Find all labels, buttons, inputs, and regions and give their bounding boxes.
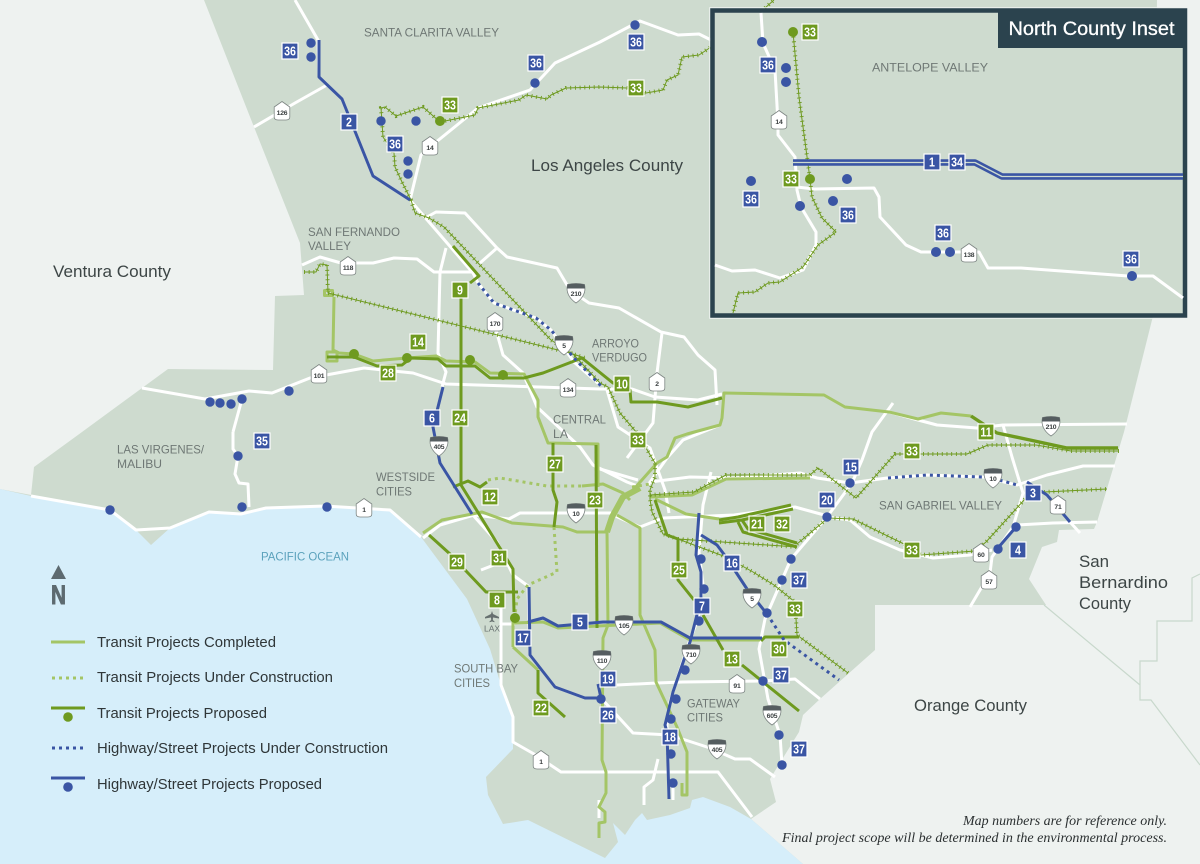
icon: north arrow: N [51, 580, 66, 610]
shield 101: 101 [314, 373, 325, 380]
shield 170: 170 [490, 321, 501, 328]
badge 32: 32 [776, 518, 788, 532]
badge 26: 26 [602, 709, 614, 723]
inset badge 36 [935, 225, 951, 241]
shield 60: 60 [977, 552, 985, 559]
Arroyo Verdugo label: VERDUGO [592, 350, 647, 364]
badge 36 [387, 136, 403, 152]
inset badge 34 [949, 154, 965, 170]
badge 17 [515, 630, 531, 646]
inset shield 14: 14 [775, 119, 783, 126]
transit projects proposed [327, 246, 1118, 717]
badge 33 [904, 443, 920, 459]
badge 11: 11 [980, 426, 992, 440]
shield 118: 118 [343, 265, 354, 272]
badge 26 [600, 707, 616, 723]
badge 35: 35 [256, 435, 268, 449]
Central LA label: CENTRAL [553, 412, 606, 426]
badge 37: 37 [793, 574, 805, 588]
inset badge 36 [1123, 251, 1139, 267]
badge 24 [452, 410, 468, 426]
badge 31: 31 [493, 552, 505, 566]
inset badge 1 [924, 154, 940, 170]
rail under construction: line 33 with cross ties [304, 0, 1119, 673]
highway and street projects proposed [319, 40, 1070, 799]
badge 5: 5 [577, 616, 583, 630]
badge 33: 33 [906, 445, 918, 459]
shield 2 [649, 372, 665, 391]
shield I-5 north: 5 [562, 343, 566, 350]
San Gabriel Valley label: SAN GABRIEL VALLEY [879, 498, 1002, 512]
badge 33 [630, 432, 646, 448]
inset badge 36: 36 [1125, 253, 1137, 267]
San Bernardino County label: County [1079, 595, 1132, 613]
highway and street projects under construction [478, 283, 1017, 680]
shield 126: 126 [277, 110, 288, 117]
legend: transit under construction: Transit Projects Under Construction [97, 670, 333, 686]
badge 33: 33 [906, 544, 918, 558]
badge 36 [628, 34, 644, 50]
shield I-5 south [743, 588, 761, 608]
badge 33: 33 [789, 603, 801, 617]
badge 18 [662, 729, 678, 745]
inset badge 33 [783, 171, 799, 187]
badge 23 [587, 492, 603, 508]
Orange County label: Orange County [914, 697, 1028, 715]
shield I-710 [682, 644, 700, 664]
shield 1 south: 1 [539, 759, 543, 766]
badge 8: 8 [494, 594, 500, 608]
transit projects completed [324, 290, 971, 838]
shield 60 [973, 544, 989, 562]
badge 5 [572, 614, 588, 630]
shield 170 [487, 312, 503, 331]
badge 27: 27 [549, 458, 561, 472]
highway shields [274, 102, 1066, 769]
shield I-5 south: 5 [750, 596, 754, 603]
shield I-10 east [984, 468, 1002, 488]
Westside Cities label: WESTSIDE [376, 470, 435, 484]
shield I-405 south: 405 [712, 747, 723, 754]
shield 71 [1050, 496, 1066, 514]
inset background and frame [710, 8, 1188, 318]
transit projects under construction: light green dotted [488, 478, 650, 615]
inset badge 36 [760, 57, 776, 73]
badge 33: 33 [630, 82, 642, 96]
shield 57: 57 [985, 579, 993, 586]
badge 25 [671, 562, 687, 578]
shield I-10 west: 10 [572, 511, 580, 518]
Pacific Ocean label: PACIFIC OCEAN [261, 550, 349, 564]
inset badge 33: 33 [804, 26, 816, 40]
badge 29: 29 [451, 556, 463, 570]
Gateway Cities label: GATEWAY [687, 696, 740, 710]
Gateway Cities label [687, 696, 740, 724]
Las Virgenes Malibu label: MALIBU [117, 457, 162, 471]
shield 1 Malibu [356, 498, 372, 517]
badge 20: 20 [821, 494, 833, 508]
Central LA label: LA [553, 427, 568, 441]
badge 2: 2 [346, 116, 352, 130]
badge 28: 28 [382, 367, 394, 381]
badge 33: 33 [632, 434, 644, 448]
legend: highway under construction: Highway/Street Projects Under Construction [97, 741, 388, 757]
inset badge 33: 33 [785, 173, 797, 187]
badge 37: 37 [793, 743, 805, 757]
badge 22: 22 [535, 702, 547, 716]
inset: Antelope Valley label: ANTELOPE VALLEY [872, 60, 988, 74]
reference note: Final project scope will be determined in the environmental process. [781, 831, 1167, 846]
badge 4: 4 [1015, 544, 1021, 558]
badge 14: 14 [412, 336, 424, 350]
badge 24: 24 [454, 412, 466, 426]
region labels [117, 26, 1002, 724]
shield 57 [981, 570, 997, 589]
badge 36: 36 [284, 45, 296, 59]
badge 10 [614, 376, 630, 392]
inset shield 138: 138 [964, 252, 975, 259]
inset badge 34: 34 [951, 156, 963, 170]
badge 21 [749, 516, 765, 532]
inset badge 36: 36 [842, 209, 854, 223]
badge 32 [774, 516, 790, 532]
inset badge 36: 36 [762, 59, 774, 73]
Pacific Ocean [0, 489, 803, 864]
badge 13: 13 [726, 653, 738, 667]
inset roads [715, 13, 1183, 298]
legend [51, 635, 388, 793]
badge 37 [773, 667, 789, 683]
shield 134: 134 [563, 387, 574, 394]
reference note [781, 814, 1167, 846]
badge 36: 36 [630, 36, 642, 50]
badge 30 [771, 641, 787, 657]
San Fernando Valley label: SAN FERNANDO [308, 225, 400, 239]
badge 15 [843, 459, 859, 475]
shield I-10 west [567, 504, 585, 523]
badge 8 [489, 592, 505, 608]
badge 3: 3 [1030, 487, 1036, 501]
Gateway Cities label: CITIES [687, 710, 723, 724]
badge 23: 23 [589, 494, 601, 508]
icon: LAX airport: LAX [484, 624, 501, 634]
badge 30: 30 [773, 643, 785, 657]
legend: transit proposed: Transit Projects Proposed [97, 706, 267, 722]
inset badge 36 [743, 191, 759, 207]
inset dots [746, 27, 1137, 281]
Arroyo Verdugo label [592, 336, 647, 364]
badge 33 [787, 601, 803, 617]
badge 33: 33 [444, 99, 456, 113]
shield 14: 14 [426, 145, 434, 152]
icon: north arrow [51, 565, 66, 610]
badge 9 [452, 282, 468, 298]
county labels [53, 157, 1168, 715]
panel: North County Inset [710, 8, 1188, 318]
badge 16: 16 [726, 557, 738, 571]
Las Virgenes Malibu label: LAS VIRGENES/ [117, 442, 205, 456]
shield I-5 north [555, 336, 573, 355]
shield I-210 west [567, 284, 585, 303]
badge 19 [600, 671, 616, 687]
shield 1 Malibu: 1 [362, 507, 366, 514]
badge 37 [791, 741, 807, 757]
badge 36: 36 [389, 138, 401, 152]
South Bay Cities label: CITIES [454, 676, 490, 690]
badge 7 [694, 598, 710, 614]
badge 2 [341, 114, 357, 130]
shield 71: 71 [1054, 504, 1062, 511]
badge 19: 19 [602, 673, 614, 687]
shield I-105: 105 [619, 623, 630, 630]
San Bernardino County label: San [1079, 553, 1109, 571]
badge 22 [533, 700, 549, 716]
Arroyo Verdugo label: ARROYO [592, 336, 639, 350]
inset badge 36 [840, 207, 856, 223]
badge 37: 37 [775, 669, 787, 683]
inset shield 14 [771, 110, 787, 129]
Los Angeles County label: Los Angeles County [531, 157, 684, 175]
badge 4 [1010, 542, 1026, 558]
badge 28 [380, 365, 396, 381]
South Bay Cities label: SOUTH BAY [454, 662, 518, 676]
badge 25: 25 [673, 564, 685, 578]
Las Virgenes Malibu label [117, 442, 205, 471]
badge 14 [410, 334, 426, 350]
shield 1 south [533, 750, 549, 769]
shield I-210 east: 210 [1046, 424, 1057, 431]
badge 11 [978, 424, 994, 440]
San Fernando Valley label: VALLEY [308, 239, 351, 253]
shield I-710: 710 [686, 652, 697, 659]
badge 33 [904, 542, 920, 558]
shield I-405 north [430, 436, 448, 456]
legend: highway proposed: Highway/Street Projects Proposed [97, 777, 322, 793]
inset rail line 33 [733, 32, 836, 313]
green project site dots [349, 116, 520, 623]
Westside Cities label [376, 470, 435, 498]
badge 15: 15 [845, 461, 857, 475]
badge 21: 21 [751, 518, 763, 532]
badge 27 [547, 456, 563, 472]
badge 17: 17 [517, 632, 529, 646]
badge 31 [491, 550, 507, 566]
inset heading [998, 9, 1187, 48]
inset badge 1: 1 [929, 156, 935, 170]
Ventura County label: Ventura County [53, 263, 172, 281]
South Bay Cities label [454, 662, 518, 690]
badge 33 [628, 80, 644, 96]
shield I-110: 110 [597, 658, 608, 665]
shield I-405 north: 405 [434, 444, 445, 451]
inset shield 138 [961, 244, 977, 262]
badge 35 [254, 433, 270, 449]
badge 6 [424, 410, 440, 426]
badge 12: 12 [484, 491, 496, 505]
shield 118 [340, 256, 356, 275]
shield I-605: 605 [767, 713, 778, 720]
badge 7: 7 [699, 600, 705, 614]
inset heading: North County Inset [1008, 18, 1175, 40]
shield I-110 [593, 650, 611, 670]
shield I-405 south [708, 740, 726, 759]
badge 12 [482, 489, 498, 505]
badge 13 [724, 651, 740, 667]
badge 37 [791, 572, 807, 588]
inset badge 36: 36 [937, 227, 949, 241]
shield 2: 2 [655, 381, 659, 388]
Westside Cities label: CITIES [376, 484, 412, 498]
inset badge 33 [802, 24, 818, 40]
blue project site dots [105, 20, 1021, 788]
shield I-105 [615, 616, 633, 635]
legend: transit completed: Transit Projects Completed [97, 635, 276, 651]
badge 10: 10 [616, 378, 628, 392]
Central LA label [553, 412, 606, 441]
shield 91: 91 [733, 683, 741, 690]
badge 3 [1025, 485, 1041, 501]
badge 36: 36 [530, 57, 542, 71]
county boundary lines [1044, 574, 1200, 765]
badge 36 [528, 55, 544, 71]
badge 9: 9 [457, 284, 463, 298]
badge 18: 18 [664, 731, 676, 745]
San Bernardino County label: Bernardino [1079, 574, 1168, 592]
inset highway corridor 1 and 34 [793, 162, 1183, 176]
Santa Clarita Valley label: SANTA CLARITA VALLEY [364, 26, 499, 40]
shield 134 [560, 378, 576, 397]
inset badge 36: 36 [745, 193, 757, 207]
shield 14 [422, 136, 438, 155]
shield I-605 [763, 706, 781, 725]
icon: LAX airport [484, 611, 501, 634]
badge 36 [282, 43, 298, 59]
shield 91 [729, 674, 745, 693]
shield 126 [274, 102, 290, 120]
badge 20 [819, 492, 835, 508]
map number badges [254, 34, 1041, 757]
badge 29 [449, 554, 465, 570]
San Fernando Valley label [308, 225, 400, 253]
shield I-210 east [1042, 416, 1060, 436]
shield I-10 east: 10 [989, 476, 997, 483]
San Bernardino County label [1079, 553, 1168, 613]
badge 16 [724, 555, 740, 571]
reference note: Map numbers are for reference only. [962, 814, 1167, 829]
badge 6: 6 [429, 412, 435, 426]
shield 101 [311, 364, 327, 383]
badge 33 [442, 97, 458, 113]
shield I-210 west: 210 [571, 291, 582, 298]
